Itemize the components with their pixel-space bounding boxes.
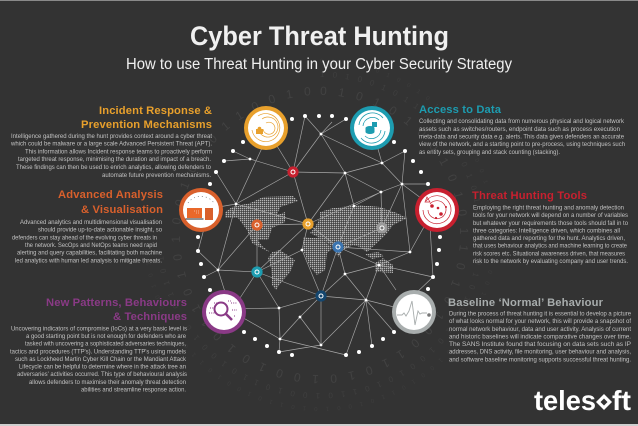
text block: baseline behaviour: and historic baselines will indicate comparative changes over time. <box>449 334 631 340</box>
text block: incident response: Intelligence gathered during the hunt provides context around a cyber threat <box>11 133 212 140</box>
panel: incident response <box>10 105 212 179</box>
panel: baseline behaviour <box>448 297 632 364</box>
heading: incident response <box>81 105 212 131</box>
text block: threat hunting tools: risk to the network by evaluating company and user trends. <box>473 258 628 265</box>
text block: new patterns: a good starting point but is not enough for defenders who are <box>26 333 187 340</box>
network connection lines <box>198 116 437 355</box>
text block: new patterns: allows defenders to maximise their anomaly threat detection <box>29 379 187 386</box>
icon: threat hunting tools <box>415 188 459 232</box>
text block: threat hunting tools <box>473 204 629 265</box>
text block: threat hunting tools: risk scores etc. Situational awareness driven, that measures <box>473 250 625 258</box>
text block: new patterns: Lifecycle can be helpful to determine where in the attack tree an <box>19 364 187 370</box>
heading: new patterns <box>46 297 187 323</box>
text block: new patterns: Uncovering indicators of compromise (IoCs) at a very basic level is <box>11 326 187 332</box>
text block: advanced analysis: defenders can stay ahead of the evolving cyber threats in <box>12 234 158 242</box>
text block: baseline behaviour: addresses, DNS activity, file monitoring, user behaviour and analysis, <box>449 348 631 356</box>
text block: access to data: view of the network, and a starting point to pre-process, using techniques such <box>419 141 626 148</box>
text block: incident response: This information allows Incident response teams to proactively perform <box>25 148 212 156</box>
heading: advanced analysis: & Visualisation <box>81 204 163 216</box>
text block: incident response: These findings can then be used to enrich analytics, allowing defenders to <box>16 164 212 171</box>
text block: baseline behaviour: During the process of threat hunting it is essential to develop a picture <box>449 310 632 318</box>
text block: new patterns: adversaries' activities occurred. This type of behavioural analysis <box>17 371 187 378</box>
text block: new patterns: abilities and streamline response action. <box>81 386 186 394</box>
text block: new patterns: such as Lockheed Martin Cyber Kill Chain or the Mandiant Attack <box>15 356 187 363</box>
text block: incident response: which could be malware or a large scale Advanced Persistent Threat (APT). <box>10 140 212 148</box>
inner network junctions <box>217 133 411 346</box>
text block: threat hunting tools: Employing the right threat hunting and anomaly detection <box>473 204 625 212</box>
title: Cyber Threat Hunting <box>190 21 449 51</box>
background binary rings: 10100101101001010110100101011010010101101001011010010101101 <box>158 72 484 398</box>
text block: advanced analysis: should provide up-to-date actionable insight, so <box>38 226 163 234</box>
heading: incident response: Incident Response & <box>99 105 212 117</box>
text block: access to data: Collecting and consolidating data from numerous physical and logical network <box>419 118 625 125</box>
heading: advanced analysis <box>58 189 163 216</box>
text block: advanced analysis: led analytics with human led analysis to mitigate threats. <box>15 258 162 264</box>
text block: baseline behaviour <box>449 310 632 364</box>
text block: incident response: targeted threat response, minimising the duration and impact of a breach. <box>18 156 211 163</box>
heading: baseline behaviour: Baseline ‘Normal’ Behaviour <box>448 297 604 309</box>
heading: threat hunting tools: Threat Hunting Tools <box>472 190 587 202</box>
text block: baseline behaviour: normal network behaviour, data and user activity. Analysis of current <box>449 326 631 333</box>
panel: new patterns <box>10 297 187 394</box>
text block: threat hunting tools: but whatever your requirements those tools should fall in to <box>473 220 629 227</box>
text block: access to data: as entity sets, grouping and stack counting (stacking). <box>419 149 560 156</box>
logo: telesoft: ft <box>612 385 631 416</box>
icon: access to data <box>350 106 394 150</box>
text block: threat hunting tools: three categories: Intelligence driven, which combines all <box>473 228 620 234</box>
text block: threat hunting tools: gathered data and reporting for the hunt. Analytics driven, <box>473 235 625 242</box>
heading: incident response: Prevention Mechanisms <box>81 119 212 131</box>
logo: telesoft <box>534 385 631 416</box>
panel: advanced analysis <box>12 189 163 264</box>
text block: incident response: automate future prevention mechanisms. <box>102 172 211 179</box>
logo: telesoft: teles <box>534 385 596 416</box>
text block: new patterns <box>10 326 187 394</box>
text block: access to data: meta-data and security data e.g. alerts. This data gives defenders an accurate <box>419 134 625 140</box>
text block: access to data <box>419 118 626 156</box>
icon: advanced analysis <box>179 188 223 232</box>
icon: new patterns <box>202 290 246 334</box>
text block: baseline behaviour: The SANS Institute found that focusing on data sets such as IP <box>449 341 631 348</box>
text block: advanced analysis: alerting and query capabilities, facilitating both machine <box>17 250 163 256</box>
icon: baseline behaviour <box>392 290 436 334</box>
icon: incident response <box>244 106 288 150</box>
heading: advanced analysis: Advanced Analysis <box>58 189 163 201</box>
text block: advanced analysis <box>12 219 163 264</box>
heading: new patterns: New Patterns, Behaviours <box>46 297 187 309</box>
text block: incident response <box>10 133 212 179</box>
coloured map hubs <box>251 166 388 302</box>
heading: new patterns: & Techniques <box>113 311 187 323</box>
text block: advanced analysis: the network. SecOps and NetOps teams need rapid <box>25 242 158 249</box>
text block: threat hunting tools: tools for your network will depend on a number of variables <box>473 212 628 219</box>
subtitle: How to use Threat Hunting in your Cyber Security Strategy <box>126 56 512 73</box>
text block: new patterns: tasked with uncovering a sophisticated adversaries techniques, <box>25 340 186 348</box>
text block: new patterns: tactics and procedures (TTP's). Understanding TTP's using models <box>10 348 186 356</box>
background binary rings: 0101101001010110100101011010010101101001011010010101101001011010100101 <box>148 60 496 410</box>
panel: access to data <box>419 104 626 156</box>
panel: threat hunting tools <box>472 190 629 265</box>
heading: access to data: Access to Data <box>419 104 502 116</box>
text block: threat hunting tools: that uses behaviour analytics and machine learning to create <box>473 242 628 250</box>
text block: advanced analysis: Advanced analytics and multidimensional visualisation <box>20 219 163 226</box>
text block: baseline behaviour: and software baseline monitoring supports successful threat hunting. <box>449 356 631 364</box>
dotted world map <box>225 196 407 290</box>
text block: access to data: assets such as switches/routers, endpoint data such as process execution <box>419 126 621 133</box>
outer white network nodes <box>196 114 442 357</box>
text block: baseline behaviour: of what looks normal for your network, this will provide a snapshot of <box>449 318 631 325</box>
